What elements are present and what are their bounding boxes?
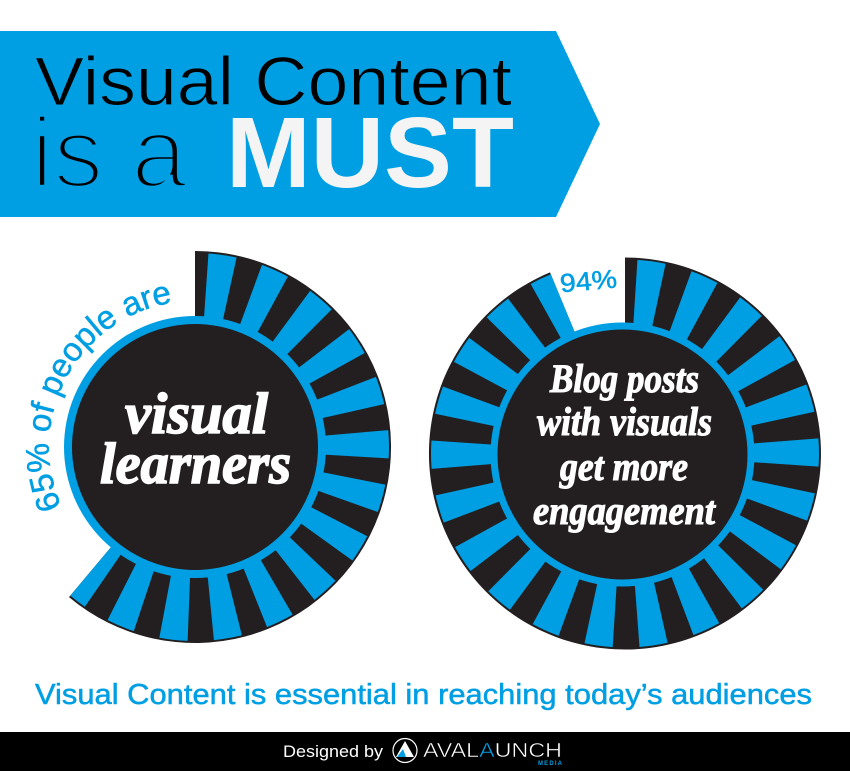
dial black sector xyxy=(429,258,821,650)
icon: avalaunch logo xyxy=(393,738,417,762)
centre text: line 2: with visuals xyxy=(537,399,712,444)
black centre disc xyxy=(498,330,748,580)
94 percent label: 94% xyxy=(559,264,618,298)
dial black sector xyxy=(69,251,391,643)
centre text: line 3: get more xyxy=(559,444,688,489)
footer bar xyxy=(0,732,850,771)
title line one: Visual Content xyxy=(35,43,512,120)
panel: 94 percent blog posts dial xyxy=(429,258,821,650)
header banner xyxy=(0,31,600,217)
black centre disc xyxy=(72,324,318,570)
centre text: visual: visual xyxy=(125,381,269,446)
dial blue spokes xyxy=(466,294,784,613)
media label: MEDIA xyxy=(538,761,563,767)
title line two: MUST: MUST xyxy=(226,97,514,209)
centre text: line 4: engagement xyxy=(533,488,717,533)
blue ring xyxy=(490,322,754,586)
avalaunch wordmark: AVAL AUNCH xyxy=(423,740,562,762)
designed by text: Designed by xyxy=(283,742,384,761)
panel: 65 percent visual learners dial xyxy=(26,251,392,643)
blue ring xyxy=(64,316,326,578)
curved label: 65% of people are xyxy=(26,286,170,511)
footer background xyxy=(0,732,850,771)
dial blue spokes xyxy=(36,288,354,606)
centre text: learners: learners xyxy=(100,431,291,496)
banner arrow shape xyxy=(0,31,600,217)
title line two: is a: is a xyxy=(31,97,187,209)
tagline: Visual Content is essential in reaching today’s audiences xyxy=(35,679,812,711)
centre text: line 1: Blog posts xyxy=(549,356,699,401)
